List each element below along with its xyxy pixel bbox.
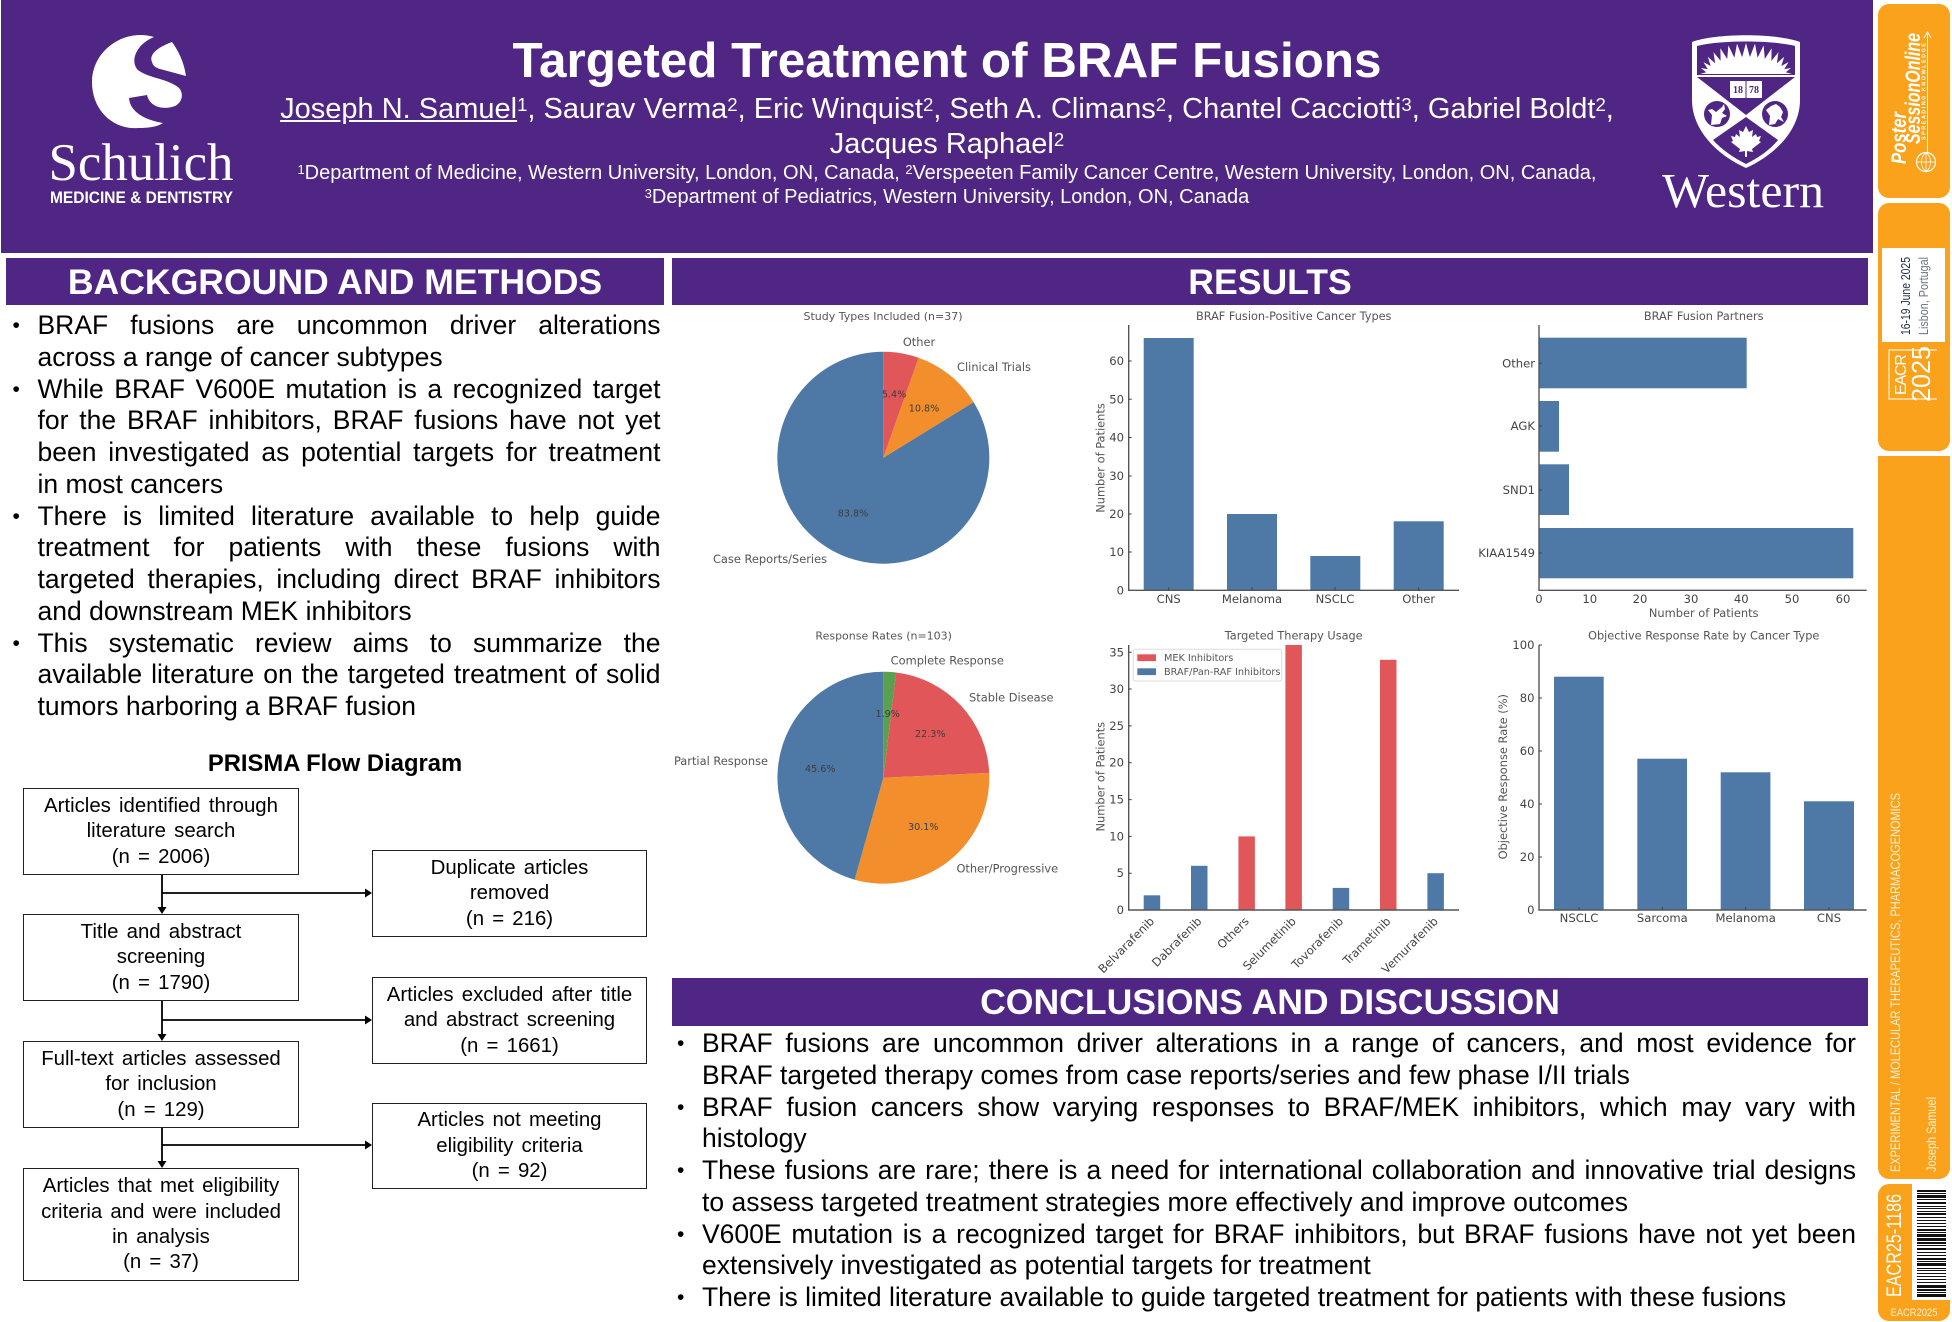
heading: Conclusions and Discussion: [672, 978, 1868, 1026]
pie chart: response rates: 45.6%: [805, 764, 836, 775]
bar chart: cancer types: NSCLC: [1316, 592, 1354, 606]
panel: EACR 2025 meeting: [1878, 203, 1950, 451]
conclusions bullet list: extensively investigated as potential targets for treatment: [702, 1250, 1371, 1280]
conclusions bullet list: These fusions are rare; there is a need for international collaboration and innovative trial designs: [702, 1155, 1856, 1185]
PRISMA flow diagram: [23, 750, 647, 1281]
logo: Schulich Medicine & Dentistry: MEDICINE & DENTISTRY: [50, 189, 233, 207]
bar chart: targeted therapy usage: 25: [1109, 719, 1124, 733]
pie chart: response rates: Stable Disease: [969, 691, 1054, 705]
pie chart: study types: Other: [903, 335, 935, 349]
box: excluded after screening: Articles excluded after title: [387, 984, 632, 1006]
bar chart: fusion partners: 60: [1836, 592, 1850, 606]
bar chart: cancer types: CNS: [1157, 592, 1181, 606]
background bullet list: While BRAF V600E mutation is a recognized target: [38, 374, 660, 404]
pie chart: response rates: 22.3%: [915, 729, 946, 740]
bar chart: cancer types: Number of Patients: [1094, 403, 1108, 513]
text: •: [12, 378, 20, 400]
text: •: [12, 632, 20, 654]
box: not eligible: (n = 92): [472, 1160, 547, 1182]
box: duplicates removed: Duplicate articles: [431, 857, 588, 879]
panel: PosterSessionOnline logo: Poster: [1888, 111, 1911, 164]
panel: topic and presenter: Joseph Samuel: [1923, 1097, 1939, 1172]
box: title and abstract screening: Title and abstract: [81, 921, 241, 943]
bar chart: cancer types: 10: [1109, 545, 1124, 559]
bar chart: targeted therapy usage: 10: [1109, 829, 1124, 843]
background bullet list: and downstream MEK inhibitors: [38, 596, 412, 626]
box: title and abstract screening: screening: [117, 946, 205, 968]
bar chart: fusion partners: 30: [1684, 592, 1698, 606]
box: not eligible: eligibility criteria: [436, 1135, 583, 1157]
box: duplicates removed: [372, 850, 647, 937]
box: excluded after screening: (n = 1661): [460, 1035, 559, 1057]
background bullet list: available literature on the targeted treatment of solid: [38, 659, 660, 689]
flow arrows: [158, 875, 372, 1168]
pie chart: study types: 5.4%: [882, 390, 906, 400]
text: •: [12, 314, 20, 337]
pie chart: response rates: Other/Progressive: [956, 861, 1058, 875]
bar chart: targeted therapy usage: 15: [1109, 793, 1124, 807]
panel: abstract number and barcode: [1878, 1184, 1950, 1321]
box: identified: [23, 788, 299, 875]
bar chart: targeted therapy usage: Targeted Therapy Usage: [1224, 630, 1363, 642]
bar chart: targeted therapy usage: [1094, 630, 1459, 976]
panel: PosterSessionOnline logo: [1878, 4, 1950, 198]
pie chart: response rates: Complete Response: [891, 653, 1004, 667]
bar chart: objective response rate: 40: [1520, 797, 1534, 811]
box: title and abstract screening: [23, 914, 299, 1001]
affiliations: 1Department of Medicine, Western University, London, ON, Canada, 2Verspeeten Family Cancer Centre, Western University, London, ON, Canada,: [298, 162, 1596, 184]
legend: [1133, 649, 1282, 681]
pie chart: response rates: Response Rates (n=103): [815, 630, 952, 642]
bar chart: fusion partners: 50: [1785, 592, 1799, 606]
background bullet list: tumors harboring a BRAF fusion: [38, 691, 416, 721]
text: •: [677, 1032, 684, 1055]
bar chart: objective response rate: 60: [1520, 744, 1534, 758]
bar chart: objective response rate: 0: [1527, 903, 1534, 917]
panel: EACR 2025 meeting: 16-19 June 2025: [1899, 257, 1913, 335]
logo: Western University: [1662, 35, 1824, 215]
bar chart: fusion partners: Number of Patients: [1649, 606, 1759, 620]
bar chart: cancer types: [1094, 310, 1459, 606]
pie chart: response rates: 30.1%: [908, 822, 939, 833]
conclusions bullet list: [677, 1028, 1856, 1312]
background bullet list: BRAF fusions are uncommon driver alterations: [38, 310, 660, 340]
box: full-text: for inclusion: [105, 1073, 217, 1095]
authors: Jacques Raphael2: [830, 128, 1064, 160]
bar chart: objective response rate: Sarcoma: [1637, 911, 1688, 925]
logo: Western University: 18: [1733, 85, 1743, 96]
bar chart: cancer types: 60: [1109, 354, 1124, 368]
conclusions bullet list: BRAF fusions are uncommon driver alterations in a range of cancers, and most evidence for: [702, 1028, 1856, 1058]
box: excluded after screening: [372, 977, 647, 1064]
panel: abstract number and barcode: EACR25-1186: [1883, 1194, 1906, 1297]
pie chart: study types: [713, 310, 1031, 566]
pie chart: response rates: Partial Response: [674, 754, 768, 768]
bar chart: targeted therapy usage: 5: [1117, 866, 1124, 880]
bar chart: cancer types: Melanoma: [1222, 592, 1282, 606]
text: •: [677, 1222, 684, 1246]
panel: EACR 2025 meeting: 2025: [1906, 346, 1936, 402]
box: excluded after screening: and abstract screening: [404, 1009, 615, 1031]
logo: Schulich Medicine & Dentistry: Schulich: [48, 134, 234, 192]
bar chart: targeted therapy usage: Tovorafenib: [1288, 914, 1346, 972]
bar chart: targeted therapy usage: Vemurafenib: [1379, 914, 1441, 976]
bar chart: fusion partners: 20: [1633, 592, 1647, 606]
bar chart: objective response rate: CNS: [1817, 911, 1841, 925]
bar chart: fusion partners: 0: [1535, 592, 1543, 606]
PRISMA heading: PRISMA Flow Diagram: [208, 750, 462, 777]
conclusions bullet list: BRAF targeted therapy comes from case reports/series and few phase I/II trials: [702, 1060, 1630, 1090]
bar chart: objective response rate: [1496, 630, 1867, 925]
authors: [280, 93, 1614, 160]
background bullet list: There is limited literature available to help guide: [38, 500, 660, 530]
pie chart: study types: 83.8%: [838, 508, 868, 520]
pie chart: study types: Clinical Trials: [957, 360, 1031, 374]
pie chart: response rates: [674, 630, 1058, 884]
box: full-text: [23, 1041, 299, 1128]
bar chart: cancer types: Other: [1402, 592, 1435, 606]
heading: Background and Methods: [6, 258, 664, 305]
bar chart: cancer types: 20: [1109, 507, 1124, 521]
heading: Results: RESULTS: [1188, 262, 1352, 302]
legend: BRAF/Pan-RAF Inhibitors: [1164, 667, 1280, 678]
bar chart: targeted therapy usage: Others: [1214, 914, 1252, 952]
background bullet list: This systematic review aims to summarize the: [38, 628, 660, 658]
bar chart: targeted therapy usage: 30: [1109, 682, 1124, 696]
bar chart: fusion partners: AGK: [1511, 419, 1535, 433]
text: •: [12, 504, 20, 528]
box: identified: Articles identified through: [44, 795, 278, 817]
bar chart: targeted therapy usage: Selumetinib: [1240, 914, 1299, 973]
text: •: [677, 1159, 684, 1182]
pie chart: study types: 10.8%: [909, 404, 939, 414]
bar chart: fusion partners: Other: [1502, 356, 1535, 370]
bar chart: cancer types: 0: [1117, 583, 1124, 597]
authors: Joseph N. Samuel1, Saurav Verma2, Eric Winquist2, Seth A. Climans2, Chantel Cacciotti3, Gabriel Boldt2,: [280, 93, 1614, 125]
bar chart: fusion partners: 40: [1734, 592, 1749, 606]
bar chart: cancer types: 30: [1109, 469, 1124, 483]
results charts: [674, 310, 1867, 976]
title: Targeted Treatment of BRAF Fusions: [512, 33, 1382, 88]
bar chart: objective response rate: 100: [1512, 638, 1534, 652]
panel: PosterSessionOnline logo: SPREADING KNOWLEDGE: [1922, 43, 1928, 140]
box: identified: (n = 2006): [112, 846, 210, 868]
bar chart: targeted therapy usage: 35: [1109, 645, 1124, 659]
bar chart: targeted therapy usage: Belvarafenib: [1095, 914, 1157, 976]
bar chart: targeted therapy usage: 20: [1109, 756, 1124, 770]
legend: MEK Inhibitors: [1164, 653, 1233, 664]
bar chart: objective response rate: Objective Response Rate (%): [1496, 694, 1510, 859]
background bullet list: been investigated as potential targets for treatment: [38, 437, 660, 467]
box: included: in analysis: [112, 1226, 210, 1248]
box: duplicates removed: (n = 216): [466, 908, 553, 930]
box: included: Articles that met eligibility: [43, 1175, 279, 1197]
background bullet list: targeted therapies, including direct BRAF inhibitors: [38, 564, 660, 594]
background bullet list: for the BRAF inhibitors, BRAF fusions have not yet: [38, 405, 660, 435]
conclusions bullet list: histology: [702, 1123, 807, 1153]
box: full-text: (n = 129): [117, 1099, 205, 1121]
box: included: criteria and were included: [41, 1201, 281, 1223]
text: •: [677, 1096, 684, 1118]
pie chart: response rates: 1.9%: [876, 709, 900, 720]
box: duplicates removed: removed: [470, 882, 549, 904]
bar chart: fusion partners: SND1: [1503, 483, 1535, 497]
logo: Schulich Medicine & Dentistry: [48, 35, 234, 207]
box: not eligible: [372, 1103, 647, 1189]
bar chart: objective response rate: 20: [1520, 850, 1534, 864]
bar chart: cancer types: 40: [1109, 430, 1124, 444]
bar chart: fusion partners: 10: [1582, 592, 1597, 606]
heading: Results: [672, 258, 1868, 305]
affiliations: [298, 162, 1596, 208]
box: identified: literature search: [87, 820, 235, 842]
affiliations: 3Department of Pediatrics, Western University, London, ON, Canada: [645, 186, 1249, 208]
bar chart: targeted therapy usage: Trametinib: [1339, 914, 1393, 968]
bar chart: cancer types: 50: [1109, 392, 1124, 406]
background bullet list: in most cancers: [38, 469, 223, 499]
panel: PosterSessionOnline logo: SessionOnline: [1902, 33, 1925, 144]
heading: Conclusions and Discussion: CONCLUSIONS AND DISCUSSION: [980, 982, 1560, 1022]
bar chart: cancer types: BRAF Fusion-Positive Cancer Types: [1196, 310, 1392, 323]
bar chart: objective response rate: 80: [1520, 691, 1534, 705]
background bullet list: across a range of cancer subtypes: [38, 342, 443, 372]
background bullet list: treatment for patients with these fusions with: [38, 532, 660, 562]
bar chart: targeted therapy usage: Dabrafenib: [1149, 914, 1204, 970]
header banner: [1, 0, 1873, 253]
bar chart: targeted therapy usage: Number of Patients: [1094, 722, 1108, 831]
conclusions bullet list: BRAF fusion cancers show varying responses to BRAF/MEK inhibitors, which may vary with: [702, 1092, 1856, 1122]
box: full-text: Full-text articles assessed: [41, 1048, 281, 1070]
pie chart: study types: Study Types Included (n=37): [803, 310, 963, 323]
text: •: [677, 1286, 684, 1309]
bar chart: objective response rate: Objective Response Rate by Cancer Type: [1588, 630, 1819, 642]
box: included: (n = 37): [123, 1251, 199, 1273]
bar chart: objective response rate: Melanoma: [1716, 911, 1776, 925]
sidebar: conference strip: [1878, 4, 1950, 1321]
conclusions bullet list: to assess targeted treatment strategies more effectively and improve outcomes: [702, 1187, 1628, 1217]
panel: topic and presenter: EXPERIMENTAL / MOLECULAR THERAPEUTICS, PHARMACOGENOMICS: [1887, 793, 1903, 1172]
conclusions bullet list: There is limited literature available to guide targeted treatment for patients with these fusions: [702, 1282, 1786, 1312]
box: title and abstract screening: (n = 1790): [112, 972, 210, 994]
bar chart: objective response rate: NSCLC: [1560, 911, 1598, 925]
panel: EACR 2025 meeting: Lisbon, Portugal: [1917, 257, 1931, 335]
background bullet list: [12, 310, 660, 721]
box: not eligible: Articles not meeting: [417, 1109, 602, 1131]
box: included: [23, 1168, 299, 1281]
bar chart: fusion partners: BRAF Fusion Partners: [1644, 310, 1764, 323]
panel: abstract number and barcode: EACR2025: [1890, 1307, 1938, 1319]
bar chart: fusion partners: [1478, 310, 1867, 620]
heading: Background and Methods: BACKGROUND AND METHODS: [68, 262, 602, 302]
conclusions bullet list: V600E mutation is a recognized target for BRAF inhibitors, but BRAF fusions have not yet been: [702, 1218, 1856, 1248]
panel: EACR 2025 meeting: EACR: [1893, 354, 1910, 395]
barcode: [1917, 1190, 1946, 1297]
bar chart: fusion partners: KIAA1549: [1478, 546, 1535, 560]
panel: topic and presenter: [1878, 456, 1950, 1179]
bar chart: targeted therapy usage: 0: [1117, 903, 1124, 917]
pie chart: study types: Case Reports/Series: [713, 552, 827, 566]
logo: Western University: 78: [1749, 85, 1759, 96]
